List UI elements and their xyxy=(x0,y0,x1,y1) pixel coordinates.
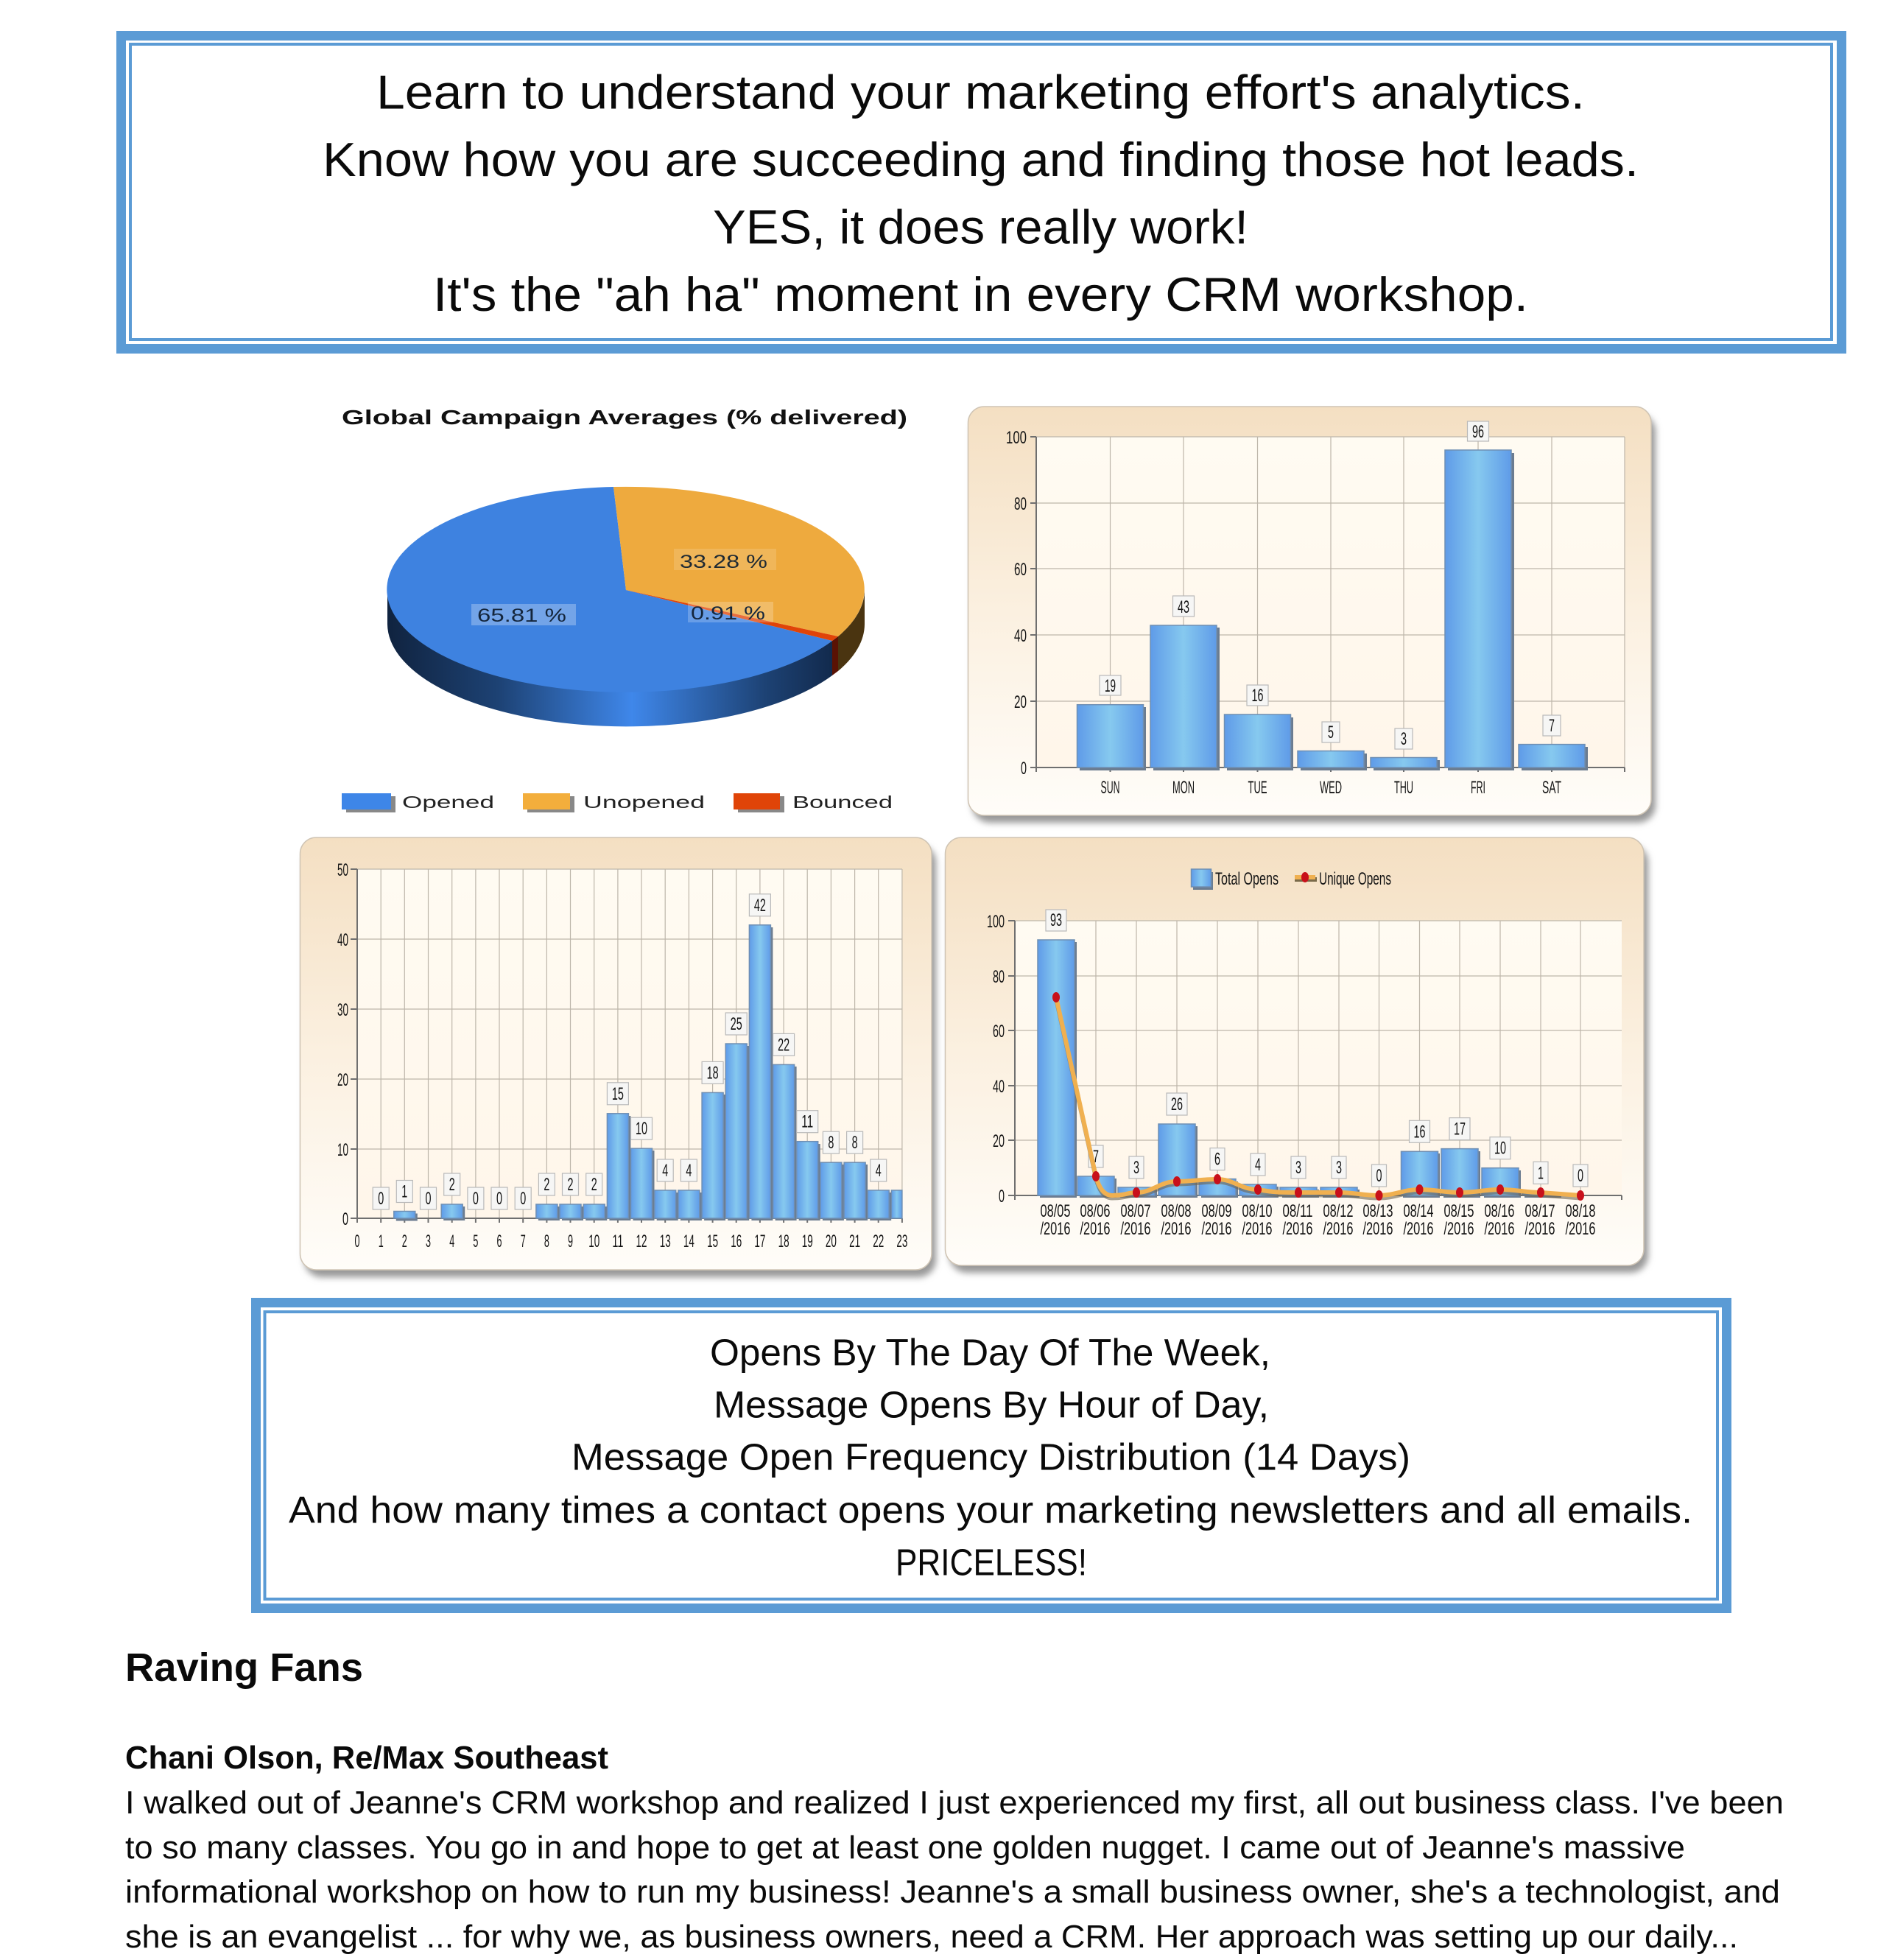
value labels xyxy=(373,894,887,1209)
axis labels: 08/16 xyxy=(1485,1201,1514,1221)
callout: chart description box: Message Opens By Hour of Day, xyxy=(714,1383,1269,1426)
heading: Raving Fans: Raving Fans xyxy=(125,1645,363,1690)
axis labels: 40 xyxy=(1014,626,1027,646)
chart title: Global Campaign Averages (% delivered) xyxy=(342,406,907,429)
axis labels: 60 xyxy=(993,1022,1005,1042)
value labels: 8 xyxy=(852,1133,858,1153)
axis labels: 08/06 xyxy=(1080,1201,1111,1221)
callout: chart description box: PRICELESS! xyxy=(896,1541,1087,1584)
axis labels: 5 xyxy=(473,1232,478,1251)
axis labels: 08/08 xyxy=(1161,1201,1192,1221)
value labels: 43 xyxy=(1178,597,1189,617)
callout: top message box xyxy=(121,35,1841,349)
axis labels: 12 xyxy=(636,1232,647,1251)
axis labels: 08/17 xyxy=(1524,1201,1555,1221)
value labels: 15 xyxy=(612,1084,624,1104)
axis labels: 22 xyxy=(873,1232,884,1251)
value labels: 3 xyxy=(1133,1158,1139,1178)
testimonial author: Chani Olson, Re/Max Southeast xyxy=(125,1740,608,1776)
axis labels: 08/13 xyxy=(1362,1201,1393,1221)
pie value labels xyxy=(471,549,776,626)
pie value labels: 0.91 % xyxy=(691,603,765,624)
axis labels: 08/14 xyxy=(1404,1201,1433,1221)
axis labels: 60 xyxy=(1014,560,1027,580)
callout: top message box: Learn to understand your marketing effort's analytics. xyxy=(376,65,1585,119)
axis labels: 10 xyxy=(337,1140,348,1160)
callout: chart description box xyxy=(256,1302,1726,1609)
value labels: 11 xyxy=(801,1112,813,1132)
axis labels: 0 xyxy=(355,1232,359,1251)
legend: Unique Opens xyxy=(1319,869,1391,889)
axis labels: 20 xyxy=(1014,692,1027,712)
bars xyxy=(394,925,902,1221)
axis labels: /2016 xyxy=(1202,1219,1231,1239)
testimonial body: she is an evangelist ... for why we, as business owners, need a CRM. Her approach was setting up our daily... xyxy=(125,1919,1738,1955)
axis labels: 23 xyxy=(896,1232,907,1251)
value labels: 16 xyxy=(1414,1122,1426,1142)
value labels: 4 xyxy=(686,1161,692,1181)
value labels: 2 xyxy=(567,1175,573,1195)
value labels: 10 xyxy=(636,1119,647,1139)
value labels: 2 xyxy=(449,1175,455,1195)
axis labels: 08/07 xyxy=(1121,1201,1150,1221)
value labels: 96 xyxy=(1472,422,1484,442)
axis labels: 80 xyxy=(993,967,1005,987)
pie value labels: 65.81 % xyxy=(477,605,566,626)
axis labels: /2016 xyxy=(1161,1219,1192,1239)
panel: opens by hour of day xyxy=(300,837,936,1277)
pie legend: Bounced xyxy=(792,793,893,812)
axis labels: 08/05 xyxy=(1040,1201,1071,1221)
axis labels: 08/12 xyxy=(1323,1201,1354,1221)
value labels: 22 xyxy=(778,1035,789,1055)
axis labels: 19 xyxy=(802,1232,813,1251)
legend: Total Opens xyxy=(1215,869,1279,889)
axis labels: 0 xyxy=(1021,759,1027,779)
testimonial body: to so many classes. You go in and hope to get at least one golden nugget. I came out of Jeanne's massive xyxy=(125,1830,1685,1866)
axis labels: TUE xyxy=(1248,778,1267,798)
axis labels: 2 xyxy=(402,1232,407,1251)
callout: chart description box: And how many times a contact opens your marketing newsletters and all emails. xyxy=(289,1489,1692,1531)
axis labels: 20 xyxy=(826,1232,837,1251)
axis labels: 14 xyxy=(683,1232,694,1251)
axis labels: 40 xyxy=(993,1077,1005,1097)
value labels: 93 xyxy=(1050,910,1062,930)
value labels: 25 xyxy=(731,1014,742,1034)
axis labels: 100 xyxy=(1006,428,1027,448)
axis labels: /2016 xyxy=(1121,1219,1150,1239)
axis labels: /2016 xyxy=(1404,1219,1433,1239)
axis labels: 16 xyxy=(731,1232,742,1251)
axis labels: 7 xyxy=(521,1232,526,1251)
pie graphic xyxy=(387,487,865,726)
axis labels: /2016 xyxy=(1362,1219,1393,1239)
axis labels: 13 xyxy=(660,1232,671,1251)
axis labels xyxy=(1006,428,1561,798)
value labels: 10 xyxy=(1494,1139,1506,1159)
axis labels: 0 xyxy=(999,1187,1005,1206)
value labels: 3 xyxy=(1295,1158,1301,1178)
axis labels: 0 xyxy=(342,1209,348,1229)
pie legend: Unopened xyxy=(583,793,705,812)
callout: top message box: YES, it does really work! xyxy=(713,200,1248,253)
value labels: 7 xyxy=(1093,1147,1099,1167)
panel: message open frequency, 14 days xyxy=(946,837,1648,1273)
axis labels: 08/10 xyxy=(1242,1201,1273,1221)
value labels: 2 xyxy=(544,1175,549,1195)
pie chart: global campaign averages xyxy=(342,406,907,812)
axis labels: 4 xyxy=(449,1232,454,1251)
axis labels: 11 xyxy=(612,1232,623,1251)
value labels: 16 xyxy=(1252,686,1264,706)
value labels: 3 xyxy=(1401,729,1407,749)
axis labels: /2016 xyxy=(1443,1219,1474,1239)
pie legend: Opened xyxy=(402,793,494,812)
axis labels: 15 xyxy=(707,1232,718,1251)
value labels: 4 xyxy=(662,1161,668,1181)
pie value labels: 33.28 % xyxy=(680,552,767,572)
axis labels: 3 xyxy=(426,1232,431,1251)
axis labels: 08/15 xyxy=(1443,1201,1474,1221)
axis labels xyxy=(337,860,907,1251)
axis labels: WED xyxy=(1320,778,1342,798)
axis labels: 6 xyxy=(496,1232,502,1251)
axis labels: SUN xyxy=(1100,778,1119,798)
value labels: 5 xyxy=(1328,723,1334,742)
value labels: 17 xyxy=(1454,1120,1466,1139)
axis labels: /2016 xyxy=(1040,1219,1071,1239)
callout: chart description box: Message Open Frequency Distribution (14 Days) xyxy=(572,1436,1410,1478)
value labels: 6 xyxy=(1214,1150,1220,1170)
axis labels: 20 xyxy=(993,1131,1005,1151)
value labels: 8 xyxy=(828,1133,834,1153)
value labels: 4 xyxy=(1255,1155,1261,1175)
value labels: 1 xyxy=(1538,1163,1544,1183)
axis labels: 80 xyxy=(1014,494,1027,514)
testimonial body: I walked out of Jeanne's CRM workshop and realized I just experienced my first, all out business class. I've been xyxy=(125,1785,1784,1821)
callout: top message box: Know how you are succeeding and finding those hot leads. xyxy=(323,133,1639,186)
value labels: 0 xyxy=(496,1189,502,1209)
value labels xyxy=(1100,421,1561,749)
value labels: 1 xyxy=(401,1181,407,1202)
bars xyxy=(1077,450,1588,770)
value labels: 0 xyxy=(378,1189,384,1209)
testimonial body: informational workshop on how to run my business! Jeanne's a small business owner, she's a technologist, and xyxy=(125,1874,1780,1910)
axis labels: 40 xyxy=(337,930,348,950)
value labels: 0 xyxy=(1578,1166,1583,1186)
value labels: 42 xyxy=(754,896,766,916)
axis labels: 17 xyxy=(754,1232,765,1251)
axis labels: 08/09 xyxy=(1202,1201,1231,1221)
axis labels: /2016 xyxy=(1080,1219,1111,1239)
bars xyxy=(1038,940,1561,1198)
axis labels: 20 xyxy=(337,1070,348,1090)
value labels: 7 xyxy=(1549,716,1555,736)
axis labels: /2016 xyxy=(1283,1219,1312,1239)
panel: opens by day of week xyxy=(968,407,1656,823)
value labels: 3 xyxy=(1336,1158,1342,1178)
value labels xyxy=(1046,910,1588,1187)
axis labels: 50 xyxy=(337,860,348,880)
value labels: 26 xyxy=(1171,1095,1183,1114)
axis labels: 30 xyxy=(337,1000,348,1020)
axis labels: MON xyxy=(1172,778,1195,798)
axis labels: THU xyxy=(1394,778,1413,798)
axis labels: /2016 xyxy=(1242,1219,1273,1239)
legend xyxy=(1192,869,1391,890)
axis labels: /2016 xyxy=(1323,1219,1354,1239)
axis labels: 1 xyxy=(379,1232,384,1251)
callout: top message box: It's the "ah ha" moment in every CRM workshop. xyxy=(433,267,1528,321)
value labels: 0 xyxy=(520,1189,526,1209)
axis labels xyxy=(987,912,1595,1239)
axis labels: /2016 xyxy=(1524,1219,1555,1239)
axis labels: SAT xyxy=(1542,778,1561,798)
axis labels: FRI xyxy=(1471,778,1485,798)
axis labels: 18 xyxy=(778,1232,789,1251)
value labels: 2 xyxy=(591,1175,597,1195)
testimonial: Chani Olson xyxy=(125,1740,1784,1955)
value labels: 4 xyxy=(876,1161,882,1181)
value labels: 19 xyxy=(1105,676,1116,696)
unique opens line xyxy=(1052,992,1584,1201)
callout: chart description box: Opens By The Day Of The Week, xyxy=(710,1332,1270,1373)
pie legend xyxy=(342,793,893,812)
axis labels: /2016 xyxy=(1485,1219,1514,1239)
value labels: 18 xyxy=(707,1063,719,1083)
axis labels: 100 xyxy=(987,912,1005,932)
axis labels: /2016 xyxy=(1566,1219,1595,1239)
axis labels: 10 xyxy=(588,1232,599,1251)
axis labels: 9 xyxy=(568,1232,573,1251)
value labels: 0 xyxy=(473,1189,479,1209)
axis labels: 08/18 xyxy=(1566,1201,1595,1221)
testimonial body xyxy=(125,1785,1784,1955)
axis labels: 21 xyxy=(849,1232,860,1251)
value labels: 0 xyxy=(1376,1166,1382,1186)
value labels: 0 xyxy=(426,1189,432,1209)
axis labels: 08/11 xyxy=(1283,1201,1312,1221)
axis labels: 8 xyxy=(544,1232,549,1251)
